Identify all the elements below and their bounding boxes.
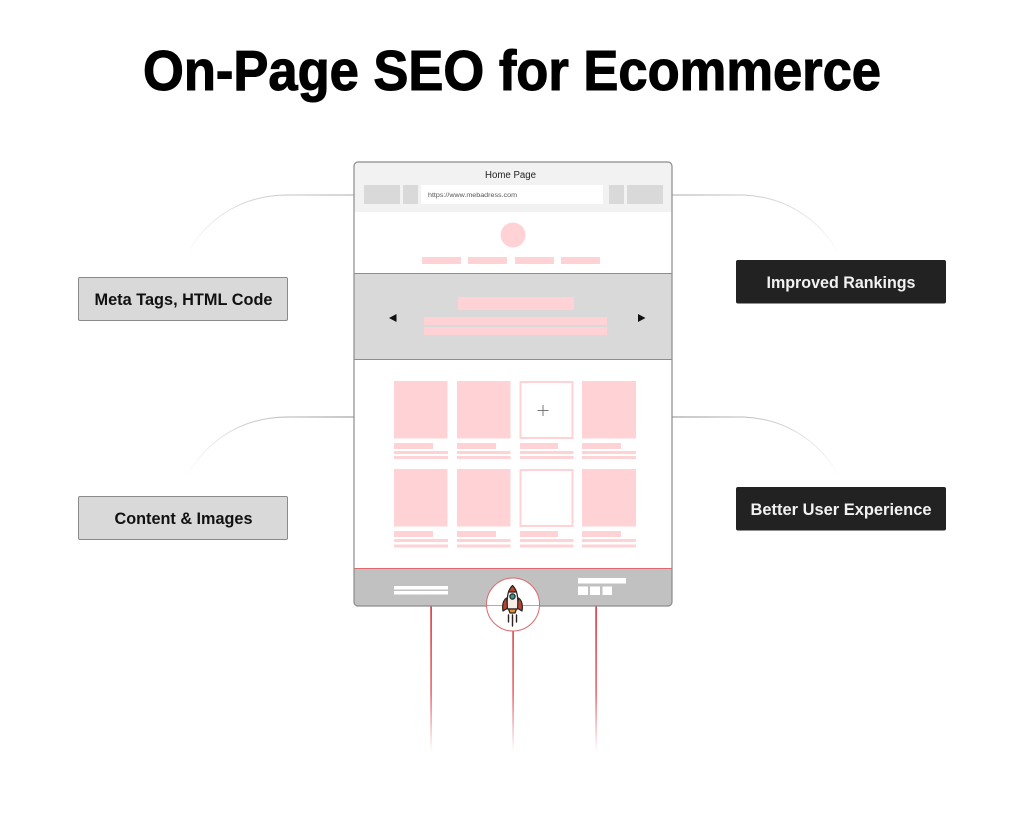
title: On-Page SEO for Ecommerce xyxy=(143,39,881,103)
vertical red line: centre xyxy=(512,606,514,752)
connector: lower right xyxy=(672,417,838,474)
label: Content & Images xyxy=(78,496,288,540)
footer edge seen through badge xyxy=(487,605,539,606)
arrow: previous xyxy=(389,314,396,322)
connector: top right xyxy=(672,195,838,252)
label: Better User Experience xyxy=(736,487,946,530)
label: Content & Images: Content & Images xyxy=(114,509,252,528)
arrow: next xyxy=(638,314,646,322)
product row 1 xyxy=(394,381,636,459)
label: Improved Rankings xyxy=(736,260,946,304)
browser wireframe xyxy=(354,162,672,606)
browser toolbar: https://www.mebadress.com xyxy=(428,192,517,199)
browser toolbar xyxy=(354,162,672,212)
product grid xyxy=(394,381,636,548)
connector: lower left xyxy=(188,417,354,474)
browser outline xyxy=(354,162,672,606)
footer xyxy=(354,568,672,606)
hero slider xyxy=(354,273,672,360)
rocket badge xyxy=(486,578,540,631)
connector: top left xyxy=(188,195,354,252)
icon: rocket xyxy=(503,586,522,626)
label: Meta Tags, HTML Code xyxy=(78,278,288,320)
label: Improved Rankings: Improved Rankings xyxy=(766,273,916,292)
label: Meta Tags, HTML Code: Meta Tags, HTML Code xyxy=(94,290,272,309)
address bar xyxy=(421,185,603,204)
page name: Home Page xyxy=(485,170,536,181)
vertical red line: right xyxy=(595,606,597,752)
site header: logo and nav xyxy=(422,222,600,264)
page background xyxy=(354,162,672,606)
label: Better User Experience: Better User Experience xyxy=(750,500,932,519)
vertical red line: left xyxy=(430,606,432,752)
product row 2 xyxy=(394,469,636,548)
